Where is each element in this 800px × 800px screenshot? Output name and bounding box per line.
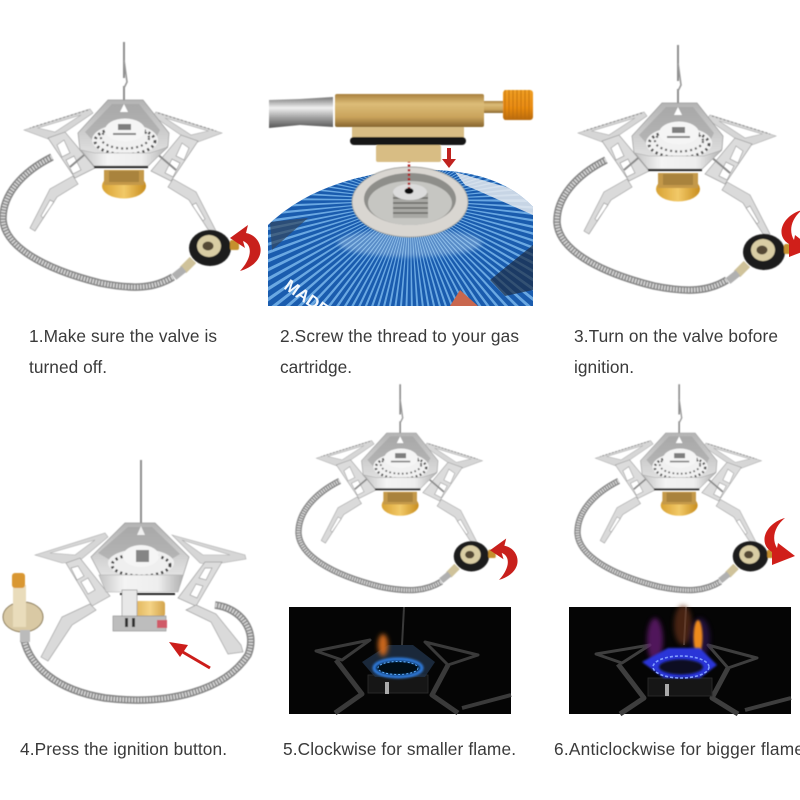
stove hose (298, 481, 441, 590)
stove hose (3, 157, 173, 287)
arrow: turn valve on (781, 210, 800, 257)
gas connector (720, 541, 775, 581)
step 2 caption: cartridge. (280, 357, 352, 377)
blue flame ring (362, 634, 435, 694)
step 5 caption: 5.Clockwise for smaller flame. (283, 739, 516, 759)
valve rim (352, 160, 468, 237)
step 6 caption: 6.Anticlockwise for bigger flame (554, 739, 800, 759)
step 2 caption: 2.Screw the thread to your gas (280, 326, 519, 346)
gas connector (441, 541, 496, 581)
step 1 caption: turned off. (29, 357, 107, 377)
panel: step 2 cartridge photo (268, 90, 533, 320)
arrow: push down (442, 148, 456, 168)
gas adapter (3, 573, 43, 642)
ignition assembly (113, 590, 167, 631)
stove frame silhouette (596, 607, 791, 714)
panel: step 3 stove (557, 45, 800, 290)
brass adapter (269, 90, 533, 162)
panel: step 6 stove (577, 384, 795, 590)
stove body (595, 384, 761, 546)
stove body (316, 384, 482, 546)
step 1 caption: 1.Make sure the valve is (29, 326, 217, 346)
blue flame ring (642, 648, 717, 696)
gas connector (728, 234, 793, 281)
arrow: anticlockwise (764, 518, 795, 565)
step 4 caption: 4.Press the ignition button. (20, 739, 227, 759)
panel: step 1 stove (3, 42, 261, 287)
panel: step 5 stove (298, 384, 518, 590)
stove hose (577, 481, 720, 590)
gas connector (174, 230, 239, 277)
stove body (35, 460, 246, 661)
panel: step 4 ignition (3, 460, 251, 700)
step 3 caption: 3.Turn on the valve bofore (574, 326, 778, 346)
cartridge dome (268, 170, 533, 306)
stove hose (557, 160, 727, 290)
arrow: clockwise (490, 538, 518, 580)
panel: big flame photo (569, 605, 791, 714)
step 3 caption: ignition. (574, 357, 634, 377)
arrow: ignition button (169, 642, 210, 668)
arrow: turn valve off (230, 225, 261, 271)
cartridge lettering: MADE (281, 276, 333, 320)
stove body (24, 42, 222, 234)
step 1 caption (29, 326, 217, 377)
purple and orange flames (647, 605, 710, 662)
stove hose (24, 605, 251, 700)
step 2 caption (280, 326, 519, 377)
panel: small flame photo (289, 607, 511, 714)
stove frame silhouette (316, 607, 511, 713)
step 3 caption (574, 326, 778, 377)
stove body (578, 45, 776, 237)
